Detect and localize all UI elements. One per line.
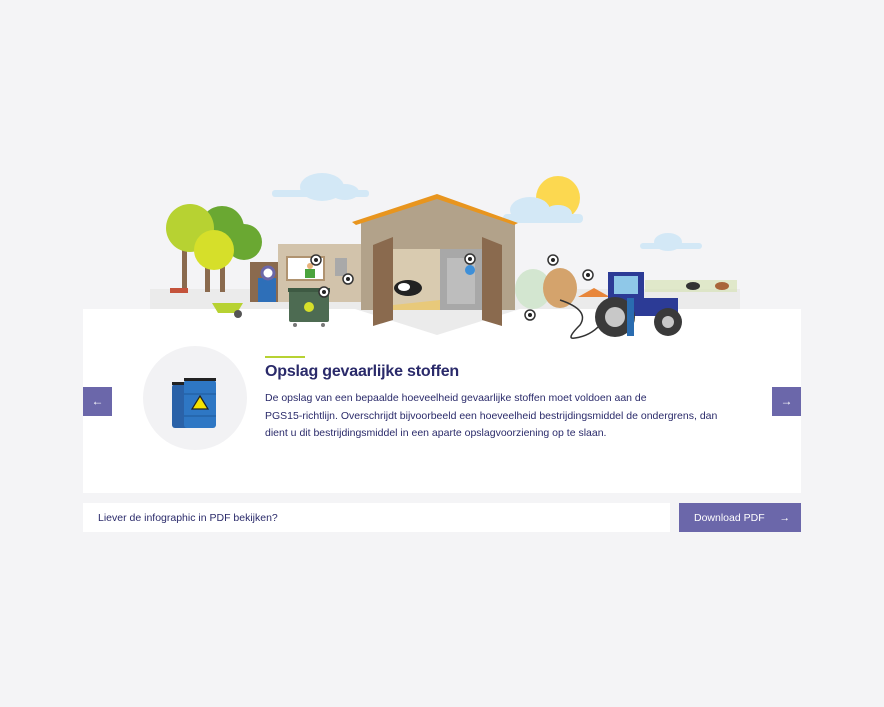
text block: [265, 392, 717, 439]
tractor: [595, 272, 682, 337]
cloud left: [272, 173, 369, 201]
fields and cows: [645, 280, 737, 292]
trees: [166, 204, 262, 293]
office building: [278, 244, 362, 302]
text block: De opslag van een bepaalde hoeveelheid gevaarlijke stoffen moet voldoen aan de: [265, 392, 647, 404]
icon: barrels: [143, 346, 247, 450]
manure heap: [578, 288, 610, 297]
sun: [536, 176, 580, 220]
footer bar: [83, 503, 670, 532]
ground: [150, 289, 740, 335]
shed with barrels: [250, 262, 280, 302]
hotspot markers: [311, 254, 593, 320]
button: download: Download PDF →: [694, 512, 790, 524]
tanks: [515, 268, 600, 338]
accent line: [265, 356, 305, 358]
panel: content: [83, 309, 801, 493]
button: previous: ←: [92, 394, 104, 408]
footer bar: Liever de infographic in PDF bekijken?: [98, 512, 278, 524]
heading: Opslag gevaarlijke stoffen: [265, 363, 459, 380]
button: download: [679, 503, 801, 532]
button: next: →: [780, 394, 792, 408]
cloud sun: [503, 197, 583, 223]
barn: [352, 194, 518, 326]
green bin: [288, 288, 330, 327]
wheelbarrow: [212, 303, 243, 318]
button: previous: [83, 387, 112, 416]
text block: dient u dit bestrijdingsmiddel in een aparte opslagvoorziening op te slaan.: [265, 427, 606, 439]
illustration: farm scene: [150, 173, 740, 339]
cloud right: [640, 233, 702, 251]
button: next: [772, 387, 801, 416]
text block: PGS15-richtlijn. Overschrijdt bijvoorbeeld een hoeveelheid bestrijdingsmiddel de ondergrens, dan: [265, 410, 717, 422]
